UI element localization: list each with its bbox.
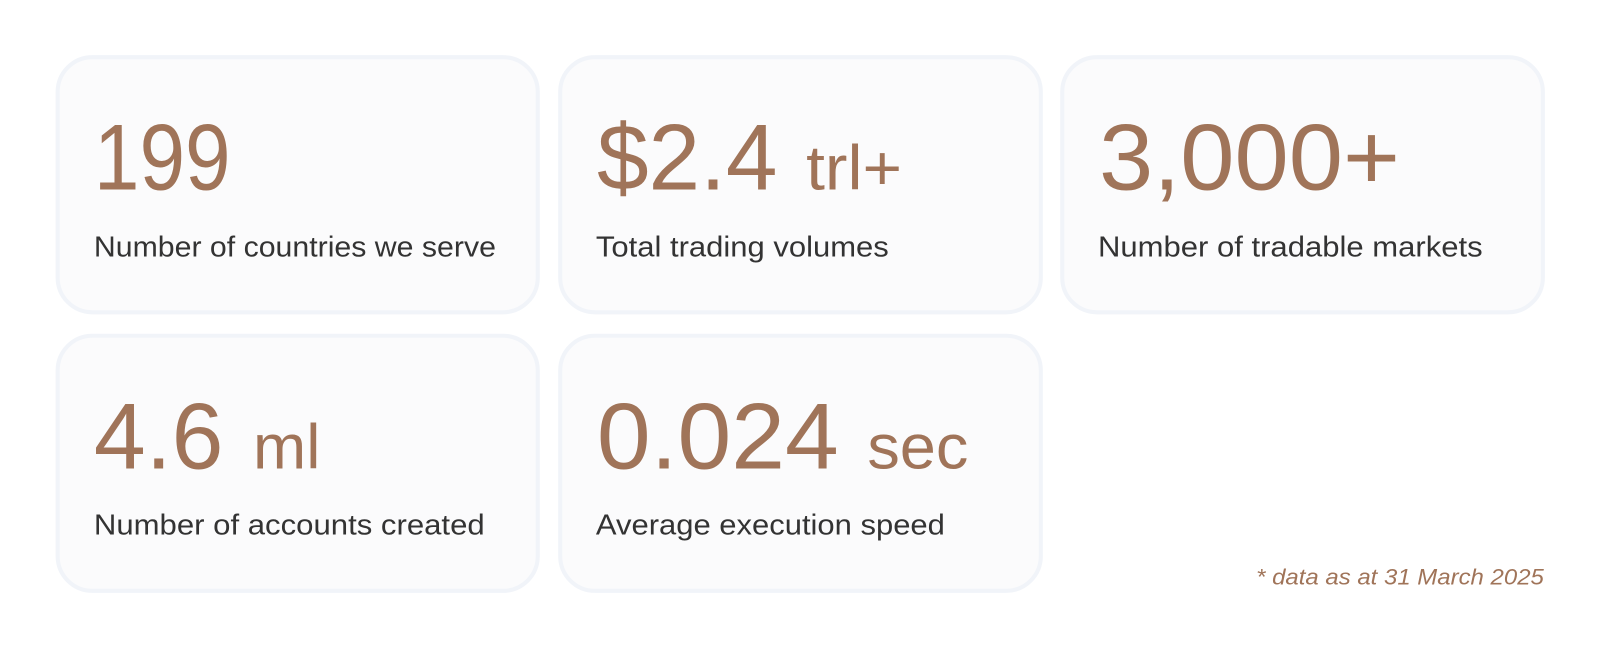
footnote: * data as at 31 March 2025 — [1256, 565, 1544, 590]
stat: 0.024 sec — [597, 383, 968, 488]
panel: accounts created — [58, 336, 538, 591]
label: tradable markets: Number of tradable markets — [1098, 232, 1483, 264]
panel: tradable markets — [1062, 57, 1543, 312]
stat: 4.6 ml — [94, 383, 320, 488]
stat: 0.024 sec: sec — [867, 412, 968, 482]
stat: 0.024 sec: 0.024 — [597, 383, 839, 488]
panel: countries served — [58, 57, 538, 312]
stat: 199: 199 — [94, 104, 231, 209]
stat: 4.6 ml: 4.6 — [94, 383, 223, 488]
panel: trading volumes — [560, 57, 1041, 312]
stat: 4.6 ml: ml — [253, 412, 320, 482]
stat: $2.4 trl+: $2.4 — [597, 104, 778, 209]
stat: $2.4 trl+: trl+ — [806, 133, 902, 203]
label: trading volumes: Total trading volumes — [596, 232, 889, 264]
label: accounts: Number of accounts created — [94, 510, 485, 542]
label: speed: Average execution speed — [596, 510, 945, 542]
stat: $2.4 trl+ — [597, 104, 902, 209]
panel: execution speed — [560, 336, 1041, 591]
stat: 3,000+: 3,000+ — [1099, 104, 1400, 209]
label: countries: Number of countries we serve — [94, 232, 496, 264]
